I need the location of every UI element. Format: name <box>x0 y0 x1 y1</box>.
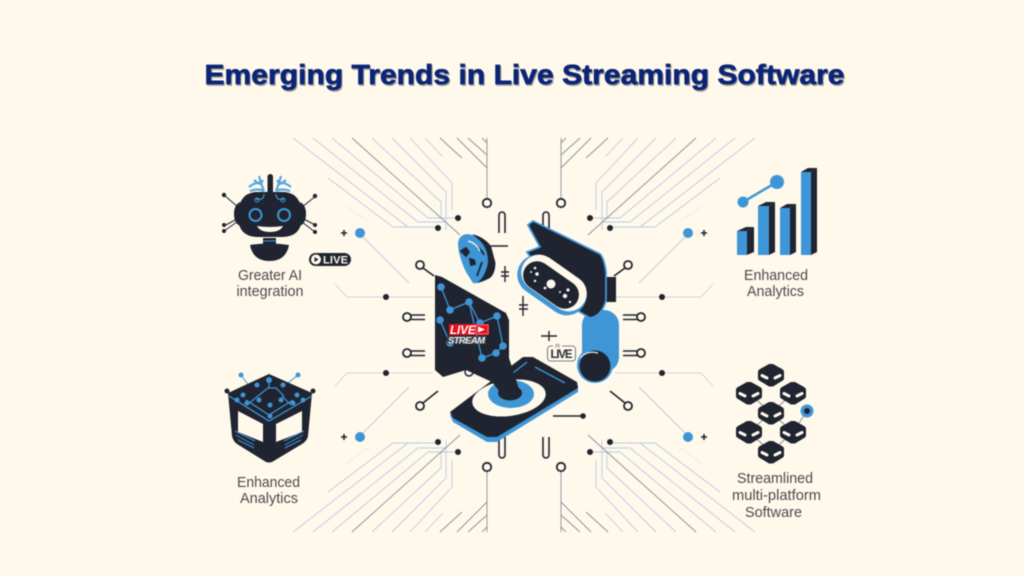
icon: network cube <box>224 372 316 462</box>
icon: blue shield <box>458 234 508 283</box>
badge: LIVE pill <box>309 253 351 266</box>
label: Greater AI integration: Greater AI <box>238 268 302 284</box>
label: Enhanced Analytics right: Enhanced <box>744 268 808 284</box>
icon: robotic arm <box>577 277 619 383</box>
badge: LIVE broadcast <box>548 343 576 361</box>
badge: LIVE STREAM: LIVE <box>450 325 476 337</box>
label: Enhanced Analytics left: Enhanced <box>237 475 300 491</box>
label: Greater AI integration: integration <box>236 284 304 300</box>
badge: LIVE STREAM: STREAM <box>448 336 486 346</box>
label: Greater AI integration <box>236 268 304 300</box>
icon: bar chart <box>737 168 817 255</box>
badge: LIVE broadcast: (•) <box>555 343 560 348</box>
badge: LIVE STREAM <box>447 324 489 346</box>
label: Enhanced Analytics right <box>744 268 808 300</box>
icon: monitor panel with graph <box>435 275 520 392</box>
icon: cross marks <box>501 266 557 341</box>
circuit traces background <box>293 138 755 532</box>
badge: LIVE pill: LIVE <box>323 254 348 266</box>
icon: AI robot head <box>222 174 317 261</box>
title: Emerging Trends in Live Streaming Software <box>206 60 846 92</box>
title: Emerging Trends in Live Streaming Software <box>204 59 844 90</box>
label: Enhanced Analytics right: Analytics <box>747 284 804 300</box>
label: Streamlined multi-platform Software: multi-platform <box>732 488 821 504</box>
icon: hexagon network <box>736 364 814 464</box>
badge: LIVE broadcast: LIVE <box>550 349 573 361</box>
label: Streamlined multi-platform Software: Software <box>745 505 802 521</box>
icon: base platform <box>450 357 586 442</box>
label: Enhanced Analytics left: Analytics <box>240 491 298 507</box>
icon: camera head <box>509 221 606 323</box>
label: Enhanced Analytics left <box>237 475 300 507</box>
label: Streamlined multi-platform Software <box>732 471 821 521</box>
label: Streamlined multi-platform Software: Streamlined <box>737 471 813 487</box>
